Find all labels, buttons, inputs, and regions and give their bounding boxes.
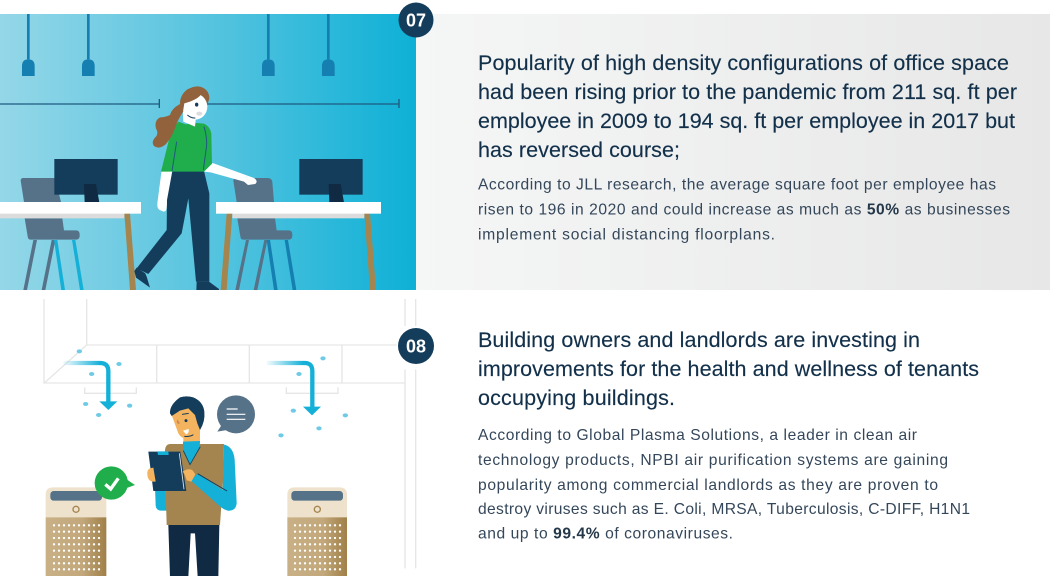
text block: Global Plasma Solutions [478,427,970,542]
text block: Global Plasma Solutions: destroy viruses such as E. Coli, MRSA, Tuberculosis, C-DIFF, H1N1 [478,501,970,518]
right desk with monitor [216,159,381,290]
woman figure [134,86,257,290]
badge: 08 [398,328,434,364]
right chair [233,178,296,290]
heading: health and wellness: improvements for the health and wellness of tenants [478,357,979,381]
measurement lines [0,99,399,108]
illustration: woman walking through office [0,14,416,290]
arrow: left airflow [63,363,117,410]
air particles [77,349,348,437]
text block: JLL research: According to JLL research, the average square foot per employee has [478,176,996,194]
text block: Global Plasma Solutions: popularity among commercial landlords as they are proven to [478,477,938,494]
badge: 07 [398,2,434,38]
illustration: man with clipboard and air purifiers [44,299,416,576]
text block: JLL research [478,176,1010,244]
text block: Global Plasma Solutions: According to Global Plasma Solutions, a leader in clean air [478,427,917,444]
icon: speech bubble [217,395,255,433]
badge: 07: 07 [406,10,426,30]
text block: Global Plasma Solutions: and up to 99.4% of coronaviruses. [478,526,733,542]
heading: high density: had been rising prior to the pandemic from 211 sq. ft per [478,80,1017,104]
ceiling grid [44,299,416,568]
badge: 08: 08 [406,336,426,356]
left chair [21,178,84,290]
heading: high density: Popularity of high density configurations of office space [478,51,1009,75]
left air purifier [46,487,106,576]
text block: JLL research: implement social distancing floorplans. [478,226,775,244]
arrow: right airflow [267,363,321,415]
man figure [147,396,237,576]
heading: high density: employee in 2009 to 194 sq. ft per employee in 2017 but [478,109,1015,133]
heading: health and wellness: occupying buildings. [478,386,675,410]
text block: Global Plasma Solutions: technology products, NPBI air purification systems are gaining [478,452,948,469]
panel: section 07 [0,14,1050,290]
text panel background [416,14,1050,290]
icon: pendant lamps [22,14,335,76]
text block: JLL research: risen to 196 in 2020 and could increase as much as 50% as businesses [478,202,1010,218]
panel: section 08 [44,299,979,576]
heading: high density: has reversed course; [478,138,680,162]
heading: high density [478,51,1017,162]
heading: health and wellness [478,328,979,410]
right air purifier [287,487,347,576]
left desk with monitor [0,159,141,290]
icon: green check bubble [95,466,135,500]
heading: health and wellness: Building owners and landlords are investing in [478,328,920,352]
